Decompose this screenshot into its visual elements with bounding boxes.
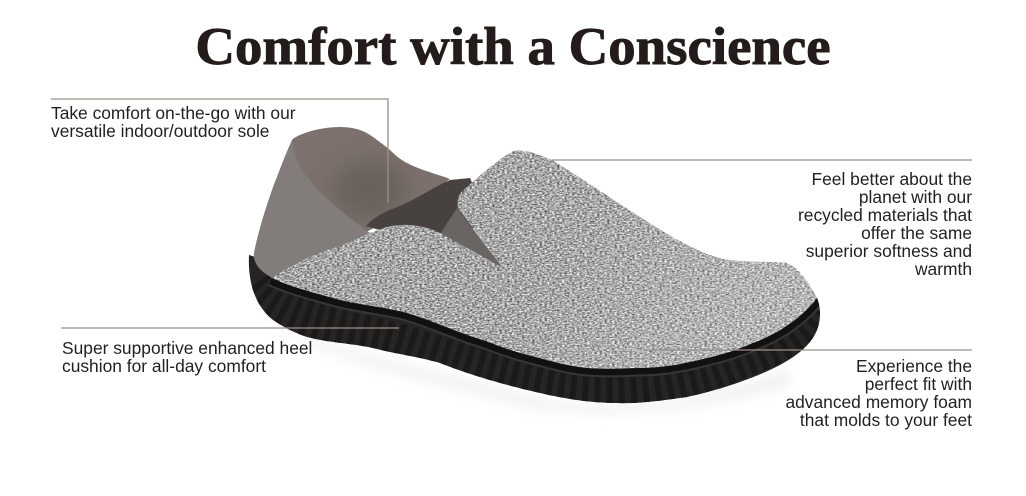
knit vamp bbox=[272, 150, 817, 369]
callout: memory foam: that molds to your feet bbox=[800, 410, 972, 430]
callout: recycled materials: Feel better about the bbox=[812, 169, 972, 189]
callout: recycled materials: planet with our bbox=[859, 187, 972, 207]
callout: memory foam: Experience the bbox=[856, 356, 972, 376]
callout: sole bbox=[51, 103, 296, 141]
leader lines bbox=[51, 99, 972, 350]
shoe illustration bbox=[51, 98, 972, 408]
callout: heel cushion bbox=[62, 338, 312, 376]
callout: memory foam: advanced memory foam bbox=[785, 392, 972, 412]
callout: memory foam bbox=[785, 356, 972, 430]
callout: sole: Take comfort on-the-go with our bbox=[51, 103, 296, 123]
callout: recycled materials: offer the same bbox=[861, 223, 972, 243]
welt bbox=[272, 278, 817, 369]
ground shadow bbox=[262, 312, 790, 414]
callout: memory foam: perfect fit with bbox=[865, 374, 972, 394]
callout: heel cushion: cushion for all-day comfort bbox=[62, 356, 266, 376]
lining bbox=[290, 127, 450, 232]
callout: recycled materials bbox=[798, 169, 972, 279]
heel panel bbox=[254, 140, 400, 285]
callout: heel cushion: Super supportive enhanced heel bbox=[62, 338, 312, 358]
callout: recycled materials: recycled materials that bbox=[798, 205, 972, 225]
terry interior bbox=[366, 178, 480, 240]
callout: recycled materials: superior softness and bbox=[806, 241, 972, 261]
callout: recycled materials: warmth bbox=[915, 259, 972, 279]
outsole bbox=[249, 255, 820, 403]
elastic gore bbox=[440, 208, 503, 268]
title: Comfort with a Conscience bbox=[195, 18, 831, 76]
callout: sole: versatile indoor/outdoor sole bbox=[51, 121, 269, 141]
